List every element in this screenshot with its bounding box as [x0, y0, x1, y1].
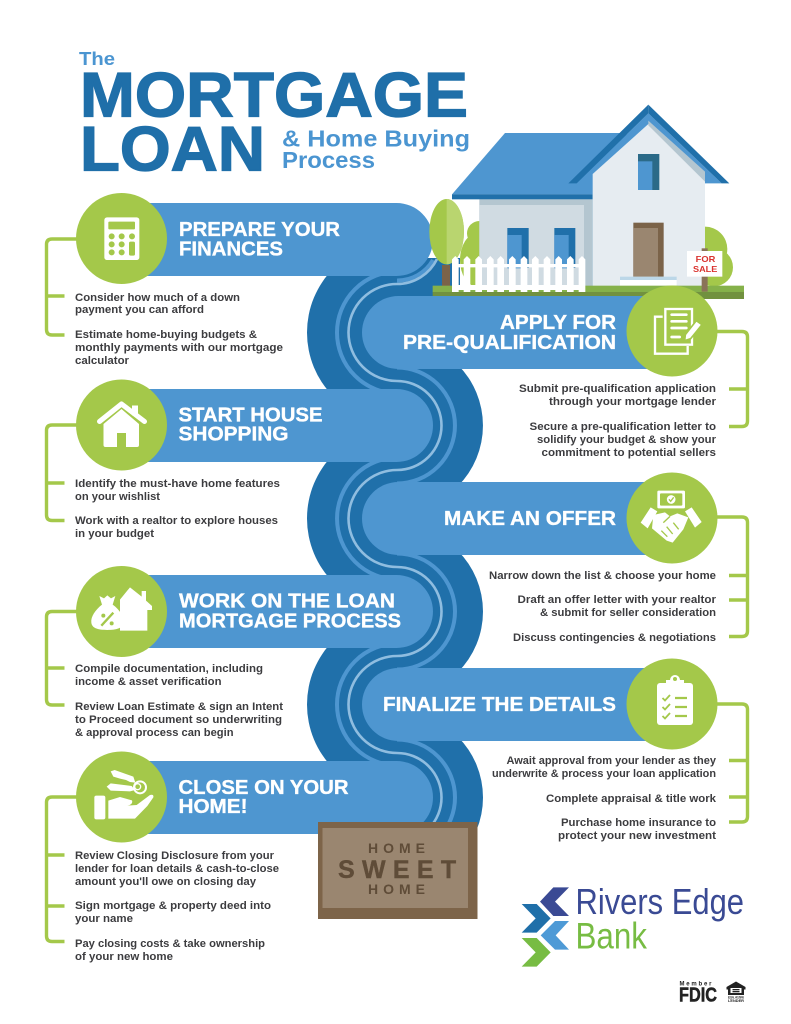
text block: prepare your finances: calculator — [75, 355, 129, 367]
text block: finalize the details: Purchase home insurance to — [561, 817, 717, 829]
text block: house shopping: in your budget — [75, 528, 155, 540]
doormat: home sweet home: SWEET — [338, 856, 463, 884]
logo chevrons — [522, 887, 569, 967]
text block: loan mortgage process: income & asset verification — [75, 676, 222, 688]
icon: clipboard checklist — [626, 658, 718, 750]
text block: pre-qualification: Secure a pre-qualification letter to — [530, 421, 717, 433]
heading: start house shopping: SHOPPING — [178, 424, 288, 446]
heading: start house shopping: START HOUSE — [178, 404, 322, 426]
text block: prepare your finances: Estimate home-buying budgets & — [75, 329, 257, 341]
title: Loan: LOAN — [80, 114, 265, 184]
equal housing lender mark: LENDER — [728, 999, 744, 1003]
logo wordmark: Rivers Edge — [576, 881, 744, 922]
banner: close on your home — [121, 761, 433, 834]
text block: house shopping: Work with a realtor to explore houses — [75, 515, 278, 527]
text block: close on your home: Review Closing Disclosure from your — [75, 850, 274, 862]
house left wing — [452, 133, 627, 287]
logo wordmark: bank: Bank — [576, 916, 647, 956]
heading: work on the loan mortgage process: MORTGAGE PROCESS — [179, 610, 401, 632]
title: Home Buying: & Home Buying — [282, 126, 470, 152]
text block: close on your home: of your new home — [75, 951, 173, 963]
icon: documents and pen — [626, 286, 718, 376]
heading: prepare your finances — [179, 219, 341, 260]
icon: money and handshake — [626, 472, 718, 564]
serpentine road — [307, 242, 483, 884]
text block: loan mortgage process — [75, 663, 283, 739]
heading: close on your home: HOME! — [178, 796, 248, 818]
for sale sign — [687, 248, 722, 292]
house illustration — [429, 105, 744, 299]
icon: keys in hand — [76, 752, 167, 842]
text block: finalize the details — [492, 755, 717, 842]
text block: loan mortgage process: Review Loan Estimate & sign an Intent — [75, 701, 283, 713]
for sale sign: FOR — [696, 254, 715, 264]
text block: make an offer: Narrow down the list & choose your home — [489, 570, 716, 582]
text block: close on your home: amount you'll owe on closing day — [75, 876, 256, 888]
text block: finalize the details: underwrite & process your loan application — [492, 768, 716, 780]
heading: start house shopping — [178, 404, 322, 446]
picket fence — [452, 256, 585, 292]
text block: pre-qualification: through your mortgage lender — [549, 396, 716, 408]
title: The: The — [79, 49, 115, 69]
text block: prepare your finances: Consider how much of a down — [75, 292, 240, 304]
text block: close on your home: your name — [75, 913, 133, 925]
connector brackets — [46, 239, 748, 942]
FDIC member mark: FDIC — [679, 984, 717, 1006]
text block: loan mortgage process: Compile documentation, including — [75, 663, 263, 675]
text block: loan mortgage process: & approval process can begin — [75, 727, 234, 739]
text block: house shopping: Identify the must-have home features — [75, 478, 280, 490]
icon: money bag and house — [76, 566, 167, 657]
grass — [433, 286, 744, 299]
text block: close on your home — [75, 850, 279, 963]
text block: prepare your finances — [75, 292, 283, 367]
text block: house shopping — [75, 478, 280, 540]
house gable — [568, 105, 729, 286]
heading: make an offer: MAKE AN OFFER — [444, 508, 617, 530]
title: Process: Process — [282, 147, 375, 173]
title: Mortgage: MORTGAGE — [80, 60, 468, 130]
text block: make an offer — [489, 570, 716, 644]
banner: make an offer — [362, 482, 672, 555]
heading: close on your home: CLOSE ON YOUR — [178, 777, 349, 799]
heading: apply for pre-qualification — [403, 312, 617, 354]
icon: house — [76, 380, 167, 470]
text block: pre-qualification — [519, 383, 717, 459]
text block: finalize the details: Await approval from your lender as they — [506, 755, 716, 767]
equal housing lender mark: EQUAL HOUSING — [728, 996, 744, 1000]
text block: pre-qualification: Submit pre-qualification application — [519, 383, 716, 395]
doormat: home sweet home — [318, 822, 478, 919]
text block: loan mortgage process: to Proceed document so underwriting — [75, 714, 282, 726]
heading: apply for pre-qualification: APPLY FOR — [500, 312, 617, 334]
text block: pre-qualification: solidify your budget & show your — [537, 434, 716, 446]
text block: close on your home: lender for loan details & cash-to-close — [75, 863, 279, 875]
heading: prepare your finances: FINANCES — [179, 238, 283, 260]
text block: make an offer: Draft an offer letter with your realtor — [518, 594, 716, 606]
text block: make an offer: & submit for seller consideration — [540, 607, 716, 619]
icon: calculator — [76, 193, 167, 284]
for sale sign: SALE — [693, 264, 718, 274]
doormat: home sweet home: HOME — [368, 840, 430, 856]
heading: work on the loan mortgage process — [179, 590, 401, 632]
banner: work on the loan — [121, 575, 433, 648]
text block: house shopping: on your wishlist — [75, 491, 160, 503]
logo: Rivers Edge Bank — [522, 881, 744, 967]
banner: start house shopping — [121, 389, 433, 462]
banner: apply for pre-qualification — [362, 296, 672, 369]
equal housing lender mark — [726, 982, 746, 1003]
title — [79, 49, 470, 184]
banner: prepare your finances — [121, 203, 433, 276]
text block: close on your home: Sign mortgage & property deed into — [75, 900, 272, 912]
text block: make an offer: Discuss contingencies & negotiations — [513, 632, 716, 644]
heading: prepare your finances: PREPARE YOUR — [179, 219, 341, 241]
text block: close on your home: Pay closing costs & take ownership — [75, 938, 266, 950]
heading: work on the loan mortgage process: WORK ON THE LOAN — [179, 590, 395, 612]
doormat: home sweet home: HOME — [368, 881, 430, 897]
banner headings — [178, 219, 617, 818]
heading: finalize the details: FINALIZE THE DETAILS — [383, 694, 616, 716]
text block: pre-qualification: commitment to potential sellers — [542, 447, 716, 459]
heading: close on your home — [178, 777, 349, 818]
text block: prepare your finances: payment you can afford — [75, 304, 204, 316]
text block: prepare your finances: monthly payments with our mortgage — [75, 342, 283, 354]
text block: finalize the details: protect your new investment — [558, 830, 717, 842]
heading: apply for pre-qualification: PRE-QUALIFICATION — [403, 332, 616, 354]
banner: finalize the details — [362, 668, 672, 741]
tree and bushes — [429, 199, 733, 287]
text block: finalize the details: Complete appraisal & title work — [546, 793, 716, 805]
FDIC member mark: Member — [680, 982, 712, 988]
